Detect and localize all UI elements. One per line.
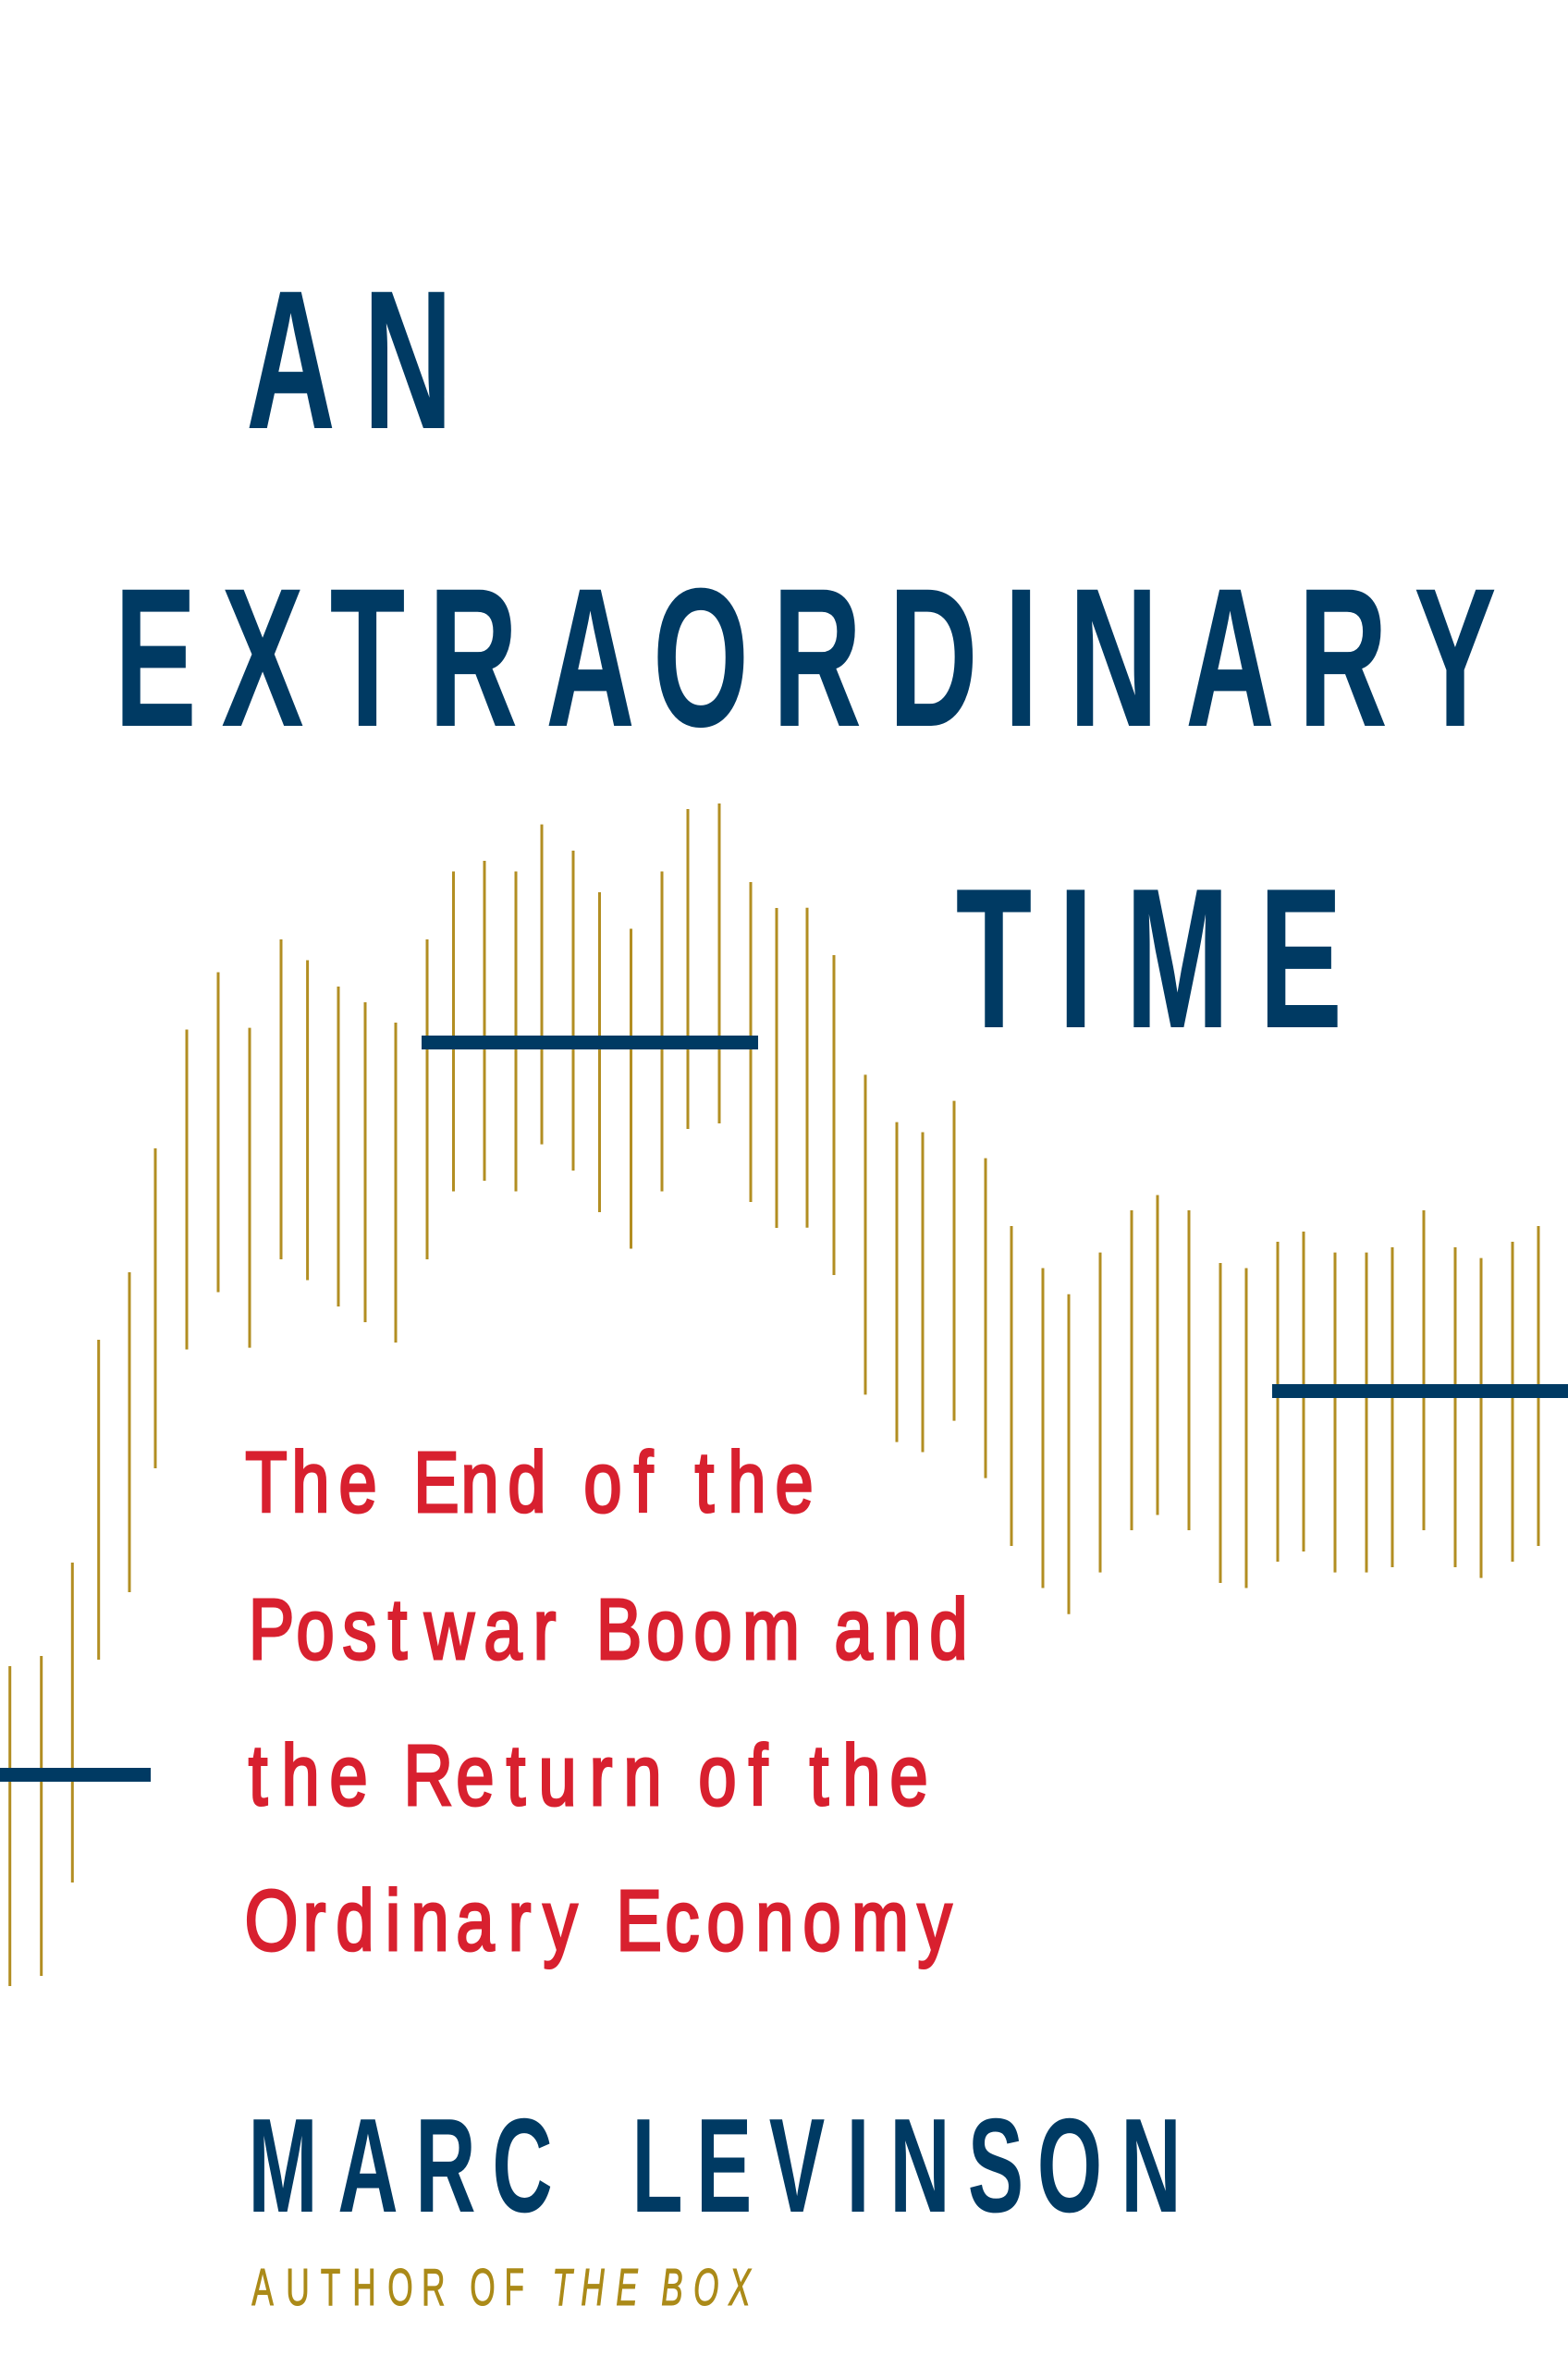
author credit: AUTHOR OF xyxy=(251,2257,524,2316)
author name: MARC LEVINSON xyxy=(248,2091,1182,2240)
title: AN xyxy=(246,249,453,471)
author credit: THE BOX xyxy=(552,2257,752,2316)
subtitle: the Return of the xyxy=(249,1727,928,1823)
title: EXTRAORDINARY xyxy=(115,546,1497,768)
subtitle xyxy=(245,1434,968,1968)
chart: gold vertical range lines xyxy=(10,803,1538,1986)
navy bar: right xyxy=(1272,1384,1568,1398)
subtitle: Postwar Boom and xyxy=(249,1581,968,1677)
navy bar: centre xyxy=(422,1036,758,1049)
subtitle: The End of the xyxy=(245,1434,814,1530)
title: TIME xyxy=(956,848,1342,1071)
title xyxy=(115,249,1497,1071)
navy bar: left xyxy=(0,1768,151,1782)
subtitle: Ordinary Economy xyxy=(245,1872,952,1968)
